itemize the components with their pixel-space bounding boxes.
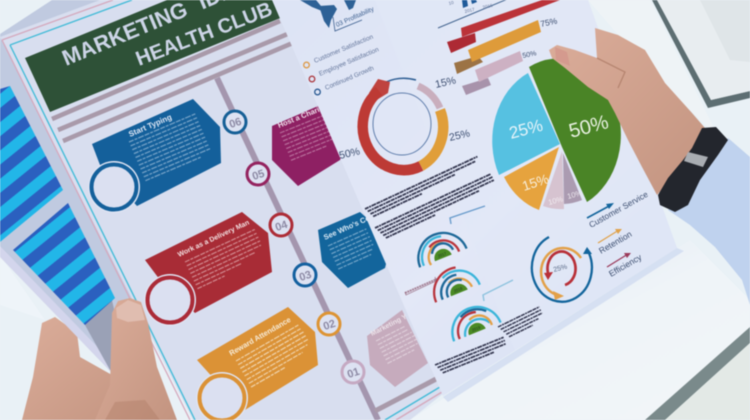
- binder top right: [652, 0, 750, 108]
- slice orange 15%: 15%: [520, 171, 551, 194]
- efficiency: Efficiency: [607, 252, 644, 279]
- body text paragraph 1: [365, 157, 482, 218]
- shirt sleeve: [668, 138, 750, 305]
- back sheet with data tables: [0, 0, 140, 373]
- slice cyan 25%: 25%: [507, 116, 545, 143]
- slice orange 15%: [504, 147, 559, 210]
- map label: 03 Profitability: [335, 6, 376, 29]
- right hand: [549, 28, 705, 195]
- panel heading: Reward Attendance: [228, 315, 292, 358]
- body text paragraph 3: [435, 337, 507, 374]
- watch: [658, 127, 728, 212]
- circular arrows 25%: 25%: [553, 264, 568, 274]
- data table lower: [13, 203, 115, 325]
- donut label 15%: 15%: [434, 75, 457, 91]
- legend item: Customer Satisfaction: [313, 33, 375, 65]
- pie chart: [492, 58, 621, 210]
- slice mauve 10%: 10%: [566, 188, 583, 201]
- panel heading: Work as a Delivery Man: [177, 219, 251, 259]
- legend: donut: [304, 33, 380, 95]
- rainbow gauge 2018: [427, 261, 480, 302]
- slice green 50%: 50%: [567, 111, 611, 143]
- bottom page stripes: [375, 378, 442, 420]
- panel: see who's coming: [318, 212, 392, 288]
- rainbow gauge 2017: [411, 225, 467, 269]
- panel heading: Start Typing: [127, 113, 173, 139]
- panel: reward attendance: [196, 307, 318, 420]
- arrow legend: [587, 189, 650, 279]
- body text paragraph 2: [375, 174, 497, 240]
- gauge caption blue top: [450, 206, 485, 224]
- front page: statistics: [272, 0, 684, 402]
- legend item: Continued Growth: [324, 65, 375, 92]
- body text paragraph 4: [498, 307, 545, 339]
- main page: marketing ideas health club: [0, 0, 445, 420]
- top bar chart: 10: [448, 0, 455, 6]
- step 02: [318, 313, 340, 335]
- panel: marketing yourself: [367, 310, 428, 387]
- gauge caption blue bottom: [483, 280, 513, 301]
- step 01: 01: [346, 366, 361, 381]
- data table upper: [0, 86, 63, 242]
- donut label 50%: 50%: [338, 146, 361, 162]
- customer service: Customer Service: [587, 189, 650, 230]
- horizontal bars: [447, 0, 560, 95]
- slice cyan 25%: [492, 73, 560, 175]
- axis labels: 2017: [464, 7, 475, 14]
- step 04: [270, 214, 292, 236]
- slice pale 10%: 10%: [547, 194, 564, 207]
- slice pale 10%: [543, 151, 564, 209]
- timeline axis: [217, 78, 378, 420]
- step 02: 02: [322, 318, 337, 333]
- left hand palm: [22, 317, 150, 420]
- step 01: [342, 361, 364, 383]
- step 05: [247, 163, 269, 185]
- panel heading: Host a Charity: [276, 102, 328, 130]
- panel heading: Marketing Y: [370, 313, 408, 338]
- bar orange: 75%: [539, 16, 558, 29]
- legend item: Employee Satisfaction: [318, 46, 380, 78]
- step 03: 03: [298, 269, 313, 284]
- step 03: [294, 264, 316, 286]
- step 06: 06: [228, 116, 243, 131]
- donut label 25%: 25%: [448, 128, 471, 144]
- title stripes: [52, 21, 295, 141]
- left hand thumb: [95, 298, 177, 420]
- panel: start typing: [88, 99, 221, 213]
- step 06: [224, 111, 246, 133]
- bar pink: 50%: [522, 50, 537, 60]
- panel: work as a delivery man: [144, 212, 272, 326]
- bar red: [447, 0, 560, 53]
- retention: Retention: [597, 229, 634, 256]
- title banner: [25, 0, 300, 112]
- donut chart: [363, 78, 443, 170]
- circular arrows 25%: [532, 237, 592, 302]
- gauge caption red: [405, 277, 437, 295]
- top bar chart: [438, 0, 510, 28]
- rainbow gauge 2017: 2017: [437, 250, 448, 259]
- rainbow gauge 2019: [445, 299, 501, 341]
- panel heading: See Who's Co: [322, 213, 372, 242]
- world map: [300, 0, 376, 31]
- slice green 50%: [529, 58, 621, 202]
- rainbow gauge 2018: 2018: [453, 285, 464, 294]
- rainbow gauge 2019: 2019: [471, 324, 482, 333]
- top bar chart: 2016: [482, 3, 493, 10]
- panel: host a charity: [272, 102, 345, 186]
- slice mauve 10%: [563, 153, 583, 204]
- step 04: 04: [274, 219, 290, 234]
- step 05: 05: [251, 168, 266, 183]
